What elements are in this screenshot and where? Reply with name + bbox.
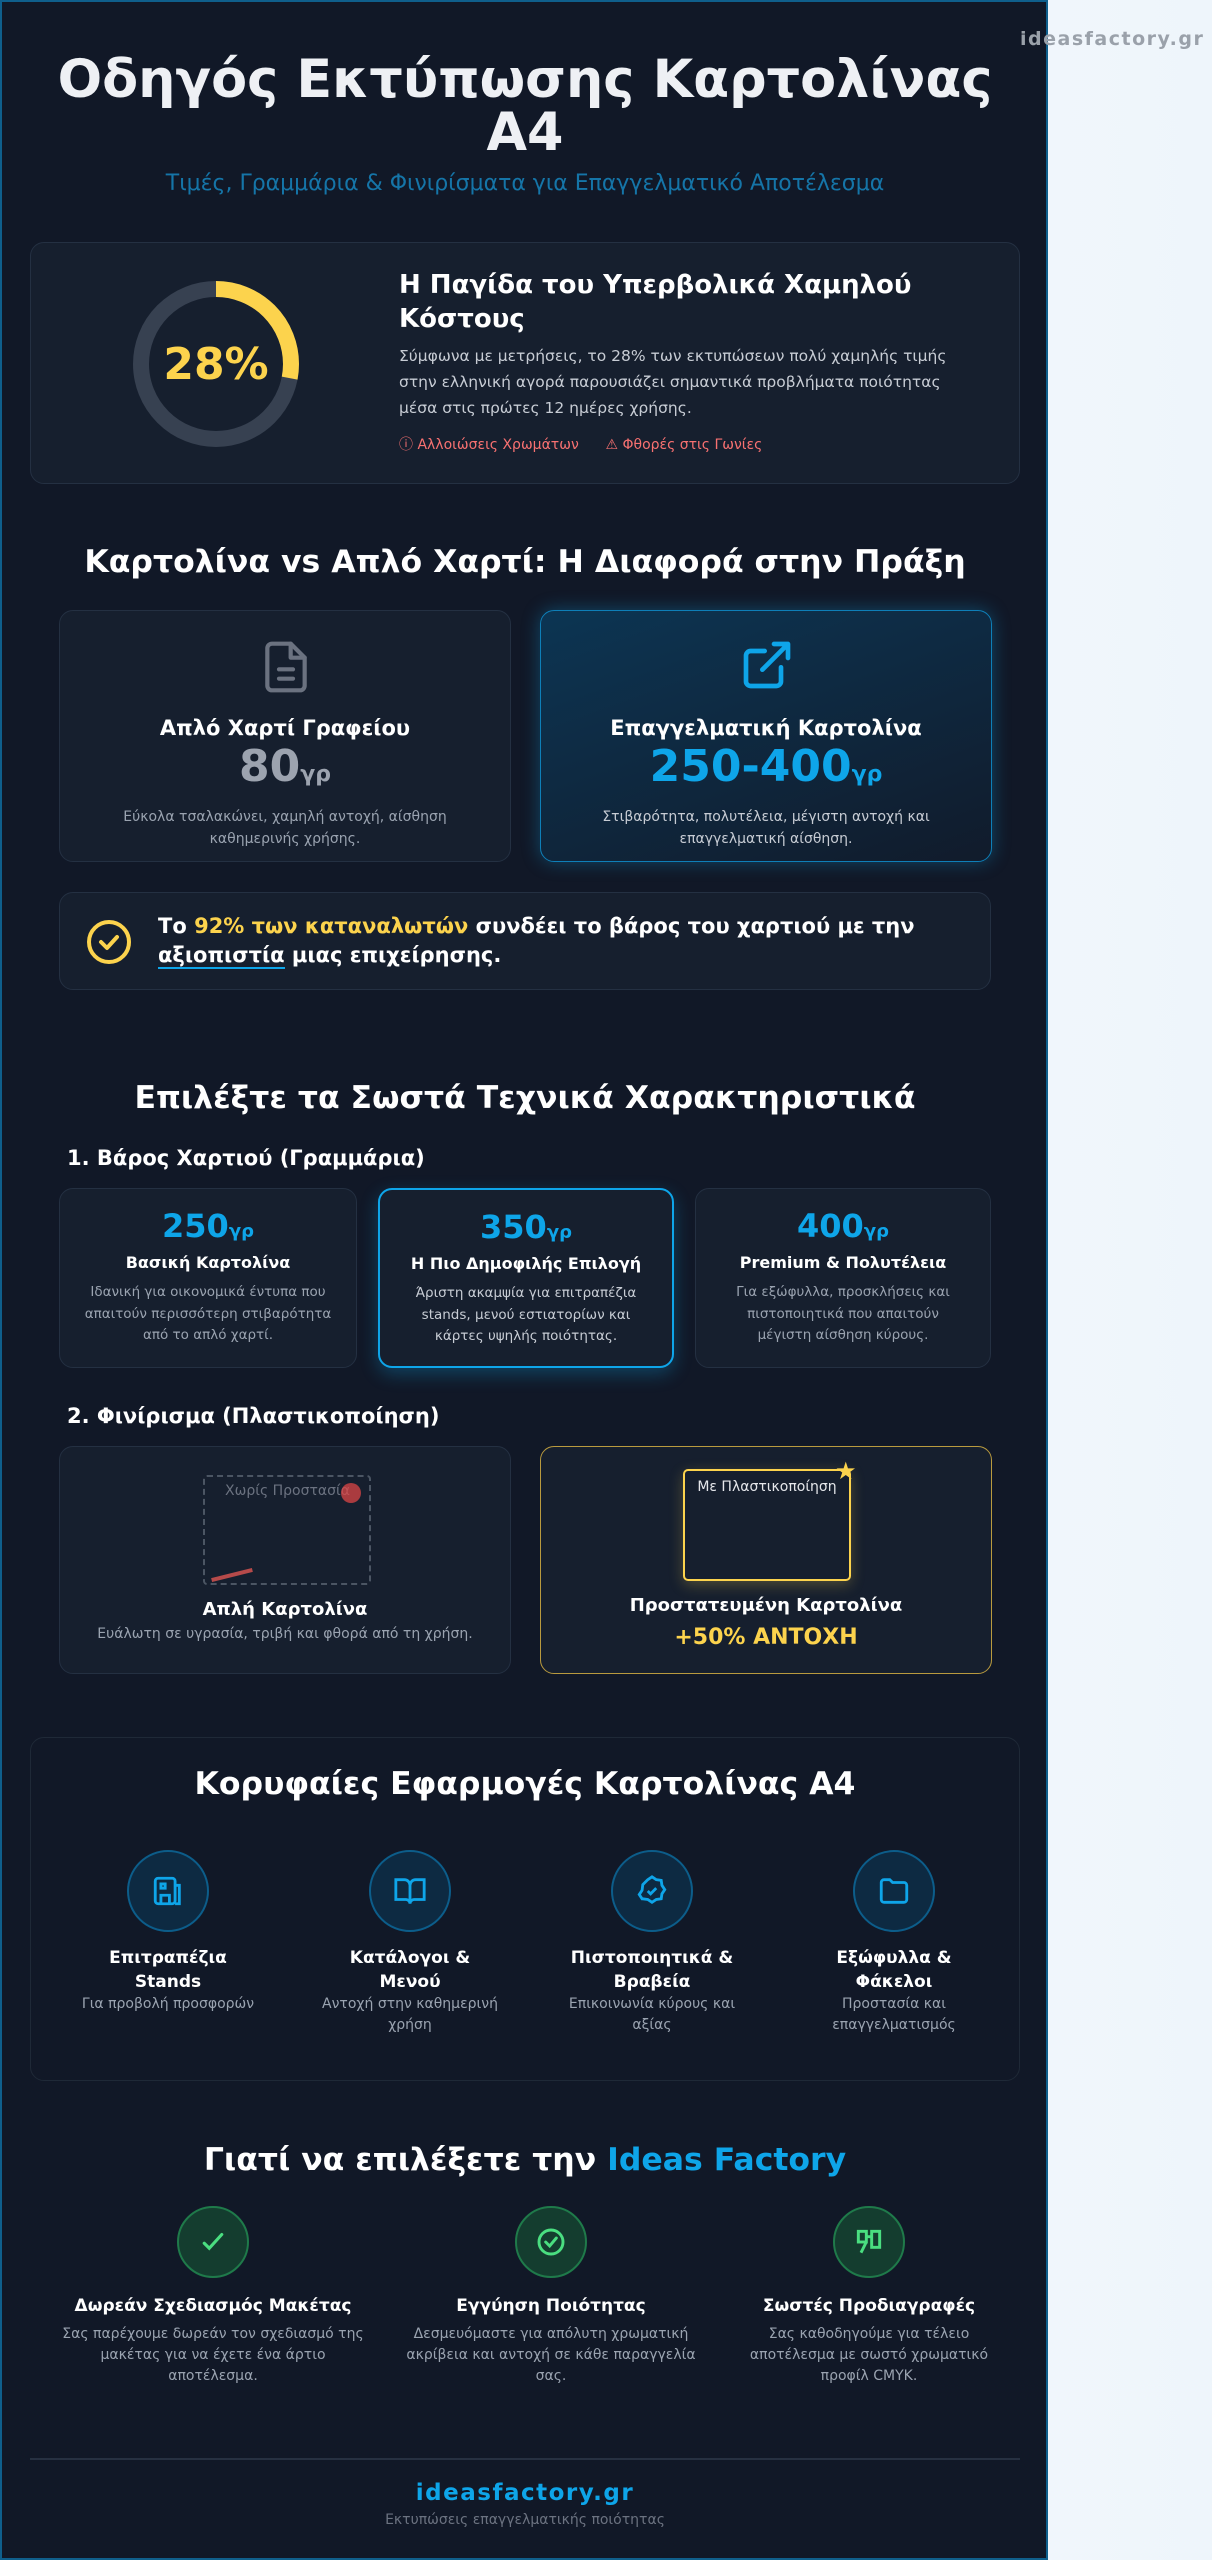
title [58,49,992,163]
donut chart 28%: 28% [163,339,269,390]
donut chart 28% [133,281,299,447]
footer: Εκτυπώσεις επαγγελματικής ποιότητας [385,2512,665,2528]
feature: specs: Σωστές Προδιαγραφές [763,2296,975,2316]
section heading: technical: Επιλέξτε τα Σωστά Τεχνικά Χαρακτηριστικά [134,1080,916,1116]
item: catalogs [322,1850,498,2033]
card: 400: Για εξώφυλλα, προσκλήσεις και πιστοποιητικά που απαιτούν μέγιστη αίσθηση κύρους. [736,1284,950,1343]
text: Απλό Χαρτί Γραφείου [160,716,410,740]
footer [385,2480,665,2528]
callout: 92% [59,892,991,990]
item: stands: Για προβολή προσφορών [82,1996,254,2012]
card: 350 [378,1188,674,1368]
heading: Η Παγίδα του Υπερβολικά Χαμηλού Κόστους [399,270,911,334]
feature: free design: Σας παρέχουμε δωρεάν τον σχεδιασμό της μακέτας για να έχετε ένα άρτιο αποτέλεσμα. [62,2326,364,2384]
card: 250: 250γρ [162,1207,254,1245]
item: covers [832,1850,956,2033]
panel: professional cardstock [540,610,992,862]
panel: plain card finish: Απλή Καρτολίνα [203,1599,367,1620]
illustration: unprotected [203,1475,371,1585]
icon: check circle [87,920,131,964]
item: covers: Προστασία και επαγγελματισμός [832,1996,956,2033]
icon: external link [744,642,790,688]
feature: specs: Σας καθοδηγούμε για τέλειο αποτέλεσμα με σωστό χρωματικό προφίλ CMYK. [750,2326,988,2384]
feature: free design: Δωρεάν Σχεδιασμός Μακέτας [75,2296,351,2316]
illustration: laminated [683,1469,851,1581]
item: catalogs: Κατάλογοι & [350,1948,470,1968]
card: 400: Premium & Πολυτέλεια [740,1253,946,1272]
title: Οδηγός Εκτύπωσης Καρτολίνας [58,49,992,110]
section heading: why us: Γιατί να επιλέξετε την Ideas Factory [204,2142,846,2178]
item: certificates: Βραβεία [614,1972,690,1992]
item: stands [82,1850,254,2012]
heading: Κορυφαίες Εφαρμογές Καρτολίνας A4 [194,1766,855,1802]
section heading: comparison: Καρτολίνα vs Απλό Χαρτί: Η Διαφορά στην Πράξη [84,544,966,580]
card: 400: 400γρ [797,1207,889,1245]
card: 250: Ιδανική για οικονομικά έντυπα που απαιτούν περισσότερη στιβαρότητα από το απλό χαρτί. [85,1284,331,1343]
panel: professional cardstock: 250-400γρ [650,741,882,792]
text [123,716,447,847]
item: catalogs: Αντοχή στην καθημερινή χρήση [322,1996,498,2033]
card: 350: Άριστη ακαμψία για επιτραπέζια stands, μενού εστιατορίων και κάρτες υψηλής ποιότητας. [416,1285,636,1344]
panel: plain card finish: Ευάλωτη σε υγρασία, τριβή και φθορά από τη χρήση. [97,1626,473,1642]
illustration: laminated: ★ [835,1457,857,1485]
item: certificates [569,1850,735,2033]
item: covers: Εξώφυλλα & [836,1948,952,1968]
feature: quality [406,2206,696,2384]
illustration: unprotected: Χωρίς Προστασία [225,1483,350,1499]
icon: document [265,642,307,692]
card: 400 [695,1188,991,1368]
illustration: laminated: Με Πλαστικοποίηση [697,1479,837,1495]
panel: plain paper [59,610,511,862]
warnings: ⓘ Αλλοιώσεις Χρωμάτων ⚠ Φθορές στις Γωνίες [399,437,762,453]
card: 350: 350γρ [480,1208,572,1246]
subheading: weight: 1. Βάρος Χαρτιού (Γραμμάρια) [67,1146,425,1170]
title: A4 [486,102,564,163]
text: 80γρ [239,741,331,792]
paragraph: Σύμφωνα με μετρήσεις, το 28% των εκτυπώσεων πολύ χαμηλής τιμής στην ελληνική αγορά παρουσιάζει σημαντικά προβλήματα ποιότητας μέσα στις πρώτες 12 ημέρες χρήσης. [399,347,946,417]
item: stands: Επιτραπέζια [109,1948,227,1968]
feature: quality: Δεσμευόμαστε για απόλυτη χρωματική ακρίβεια και αντοχή σε κάθε παραγγελία σας. [406,2326,696,2384]
item: covers: Φάκελοι [856,1972,932,1992]
panel: low cost trap [30,242,1020,484]
card: 350: Η Πιο Δημοφιλής Επιλογή [411,1254,641,1273]
card: 250 [59,1188,357,1368]
subtitle: Τιμές, Γραμμάρια & Φινιρίσματα για Επαγγελματικό Αποτέλεσμα [166,171,884,196]
panel: professional cardstock: Στιβαρότητα, πολυτέλεια, μέγιστη αντοχή και επαγγελματική αίσθηση. [602,809,930,847]
item: catalogs: Μενού [379,1972,441,1992]
panel: laminated card: Προστατευμένη Καρτολίνα [630,1595,902,1616]
feature: specs [750,2206,988,2384]
item: stands: Stands [135,1972,201,1992]
panel: professional cardstock: Επαγγελματική Καρτολίνα [610,716,922,740]
panel: laminated card [540,1446,992,1674]
text: Εύκολα τσαλακώνει, χαμηλή αντοχή, αίσθηση καθημερινής χρήσης. [123,809,447,847]
footer: ideasfactory.gr [416,2480,634,2506]
panel: laminated card: +50% ΑΝΤΟΧΗ [674,1625,858,1650]
feature: free design [62,2206,364,2384]
item: certificates: Επικοινωνία κύρους και αξίας [569,1996,735,2033]
card: 250: Βασική Καρτολίνα [126,1253,290,1272]
feature: quality: Εγγύηση Ποιότητας [456,2296,646,2316]
item: certificates: Πιστοποιητικά & [571,1948,733,1968]
panel: plain card finish [59,1446,511,1674]
callout: 92%: Το 92% των καταναλωτών συνδέει το βάρος του χαρτιού με την αξιοπιστία μιας επιχείρησης. [158,914,915,967]
subheading: finish: 2. Φινίρισμα (Πλαστικοποίηση) [67,1404,439,1428]
watermark: ideasfactory.gr [1020,28,1204,50]
panel: applications [30,1737,1020,2081]
